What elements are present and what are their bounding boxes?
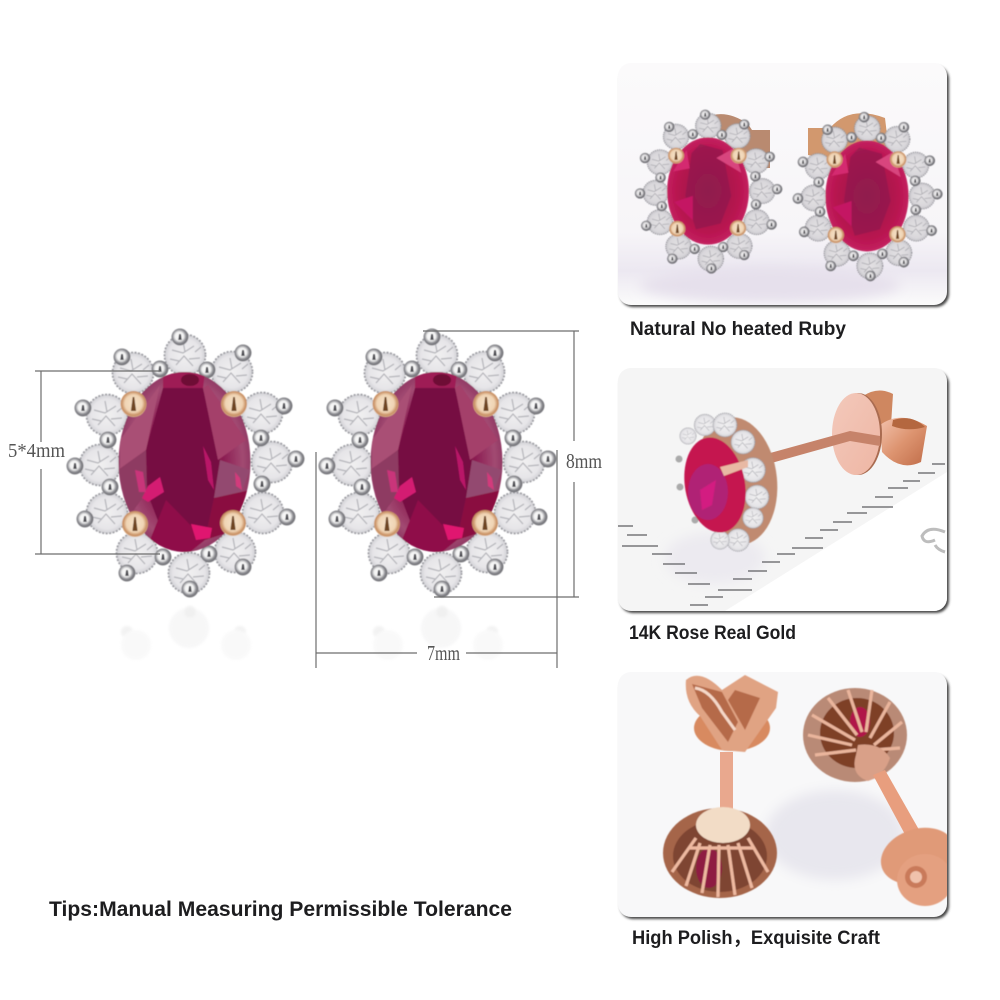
panel: natural ruby photo [618, 63, 949, 307]
right clutch [880, 827, 947, 907]
dimension 7mm: 7mm [427, 641, 460, 665]
right post [873, 770, 918, 833]
caption: high polish exquisite craft: High Polish，Exquisite Craft [632, 927, 880, 949]
diamonds on side view [676, 413, 769, 551]
dimension 5*4mm [8, 371, 160, 554]
small left earring [635, 110, 782, 274]
left earring with size dimension [8, 328, 304, 660]
left earring [66, 328, 304, 598]
right earring back [808, 113, 890, 160]
left earring back [714, 114, 770, 168]
caption: natural no heated ruby: Natural No heated Ruby [630, 318, 846, 340]
clutch back [832, 390, 927, 475]
panel: high polish photo [618, 672, 962, 919]
caption: 14k rose real gold: 14K Rose Real Gold [629, 622, 796, 644]
small right earring [793, 112, 943, 281]
panel: rose gold photo [618, 368, 949, 613]
dimension 8mm: 8mm [566, 449, 602, 473]
earring side view [676, 413, 783, 551]
right earring reflection [373, 606, 503, 660]
rose gold setting [702, 416, 778, 544]
post [770, 431, 880, 462]
right dome back [803, 688, 907, 782]
left post [720, 752, 733, 810]
right earring [318, 328, 556, 598]
side ruby [684, 437, 748, 533]
left dome back [663, 807, 777, 898]
tips text: Tips:Manual Measuring Permissible Tolerance [49, 898, 512, 921]
right earring with size dimensions [316, 328, 602, 668]
dimension 5*4mm: 5*4mm [8, 440, 65, 462]
left earring reflection [121, 606, 251, 660]
dimension 7mm [316, 450, 557, 668]
dimension 8mm [423, 331, 602, 597]
ruler [618, 464, 947, 611]
left clutch and disc [686, 675, 778, 752]
